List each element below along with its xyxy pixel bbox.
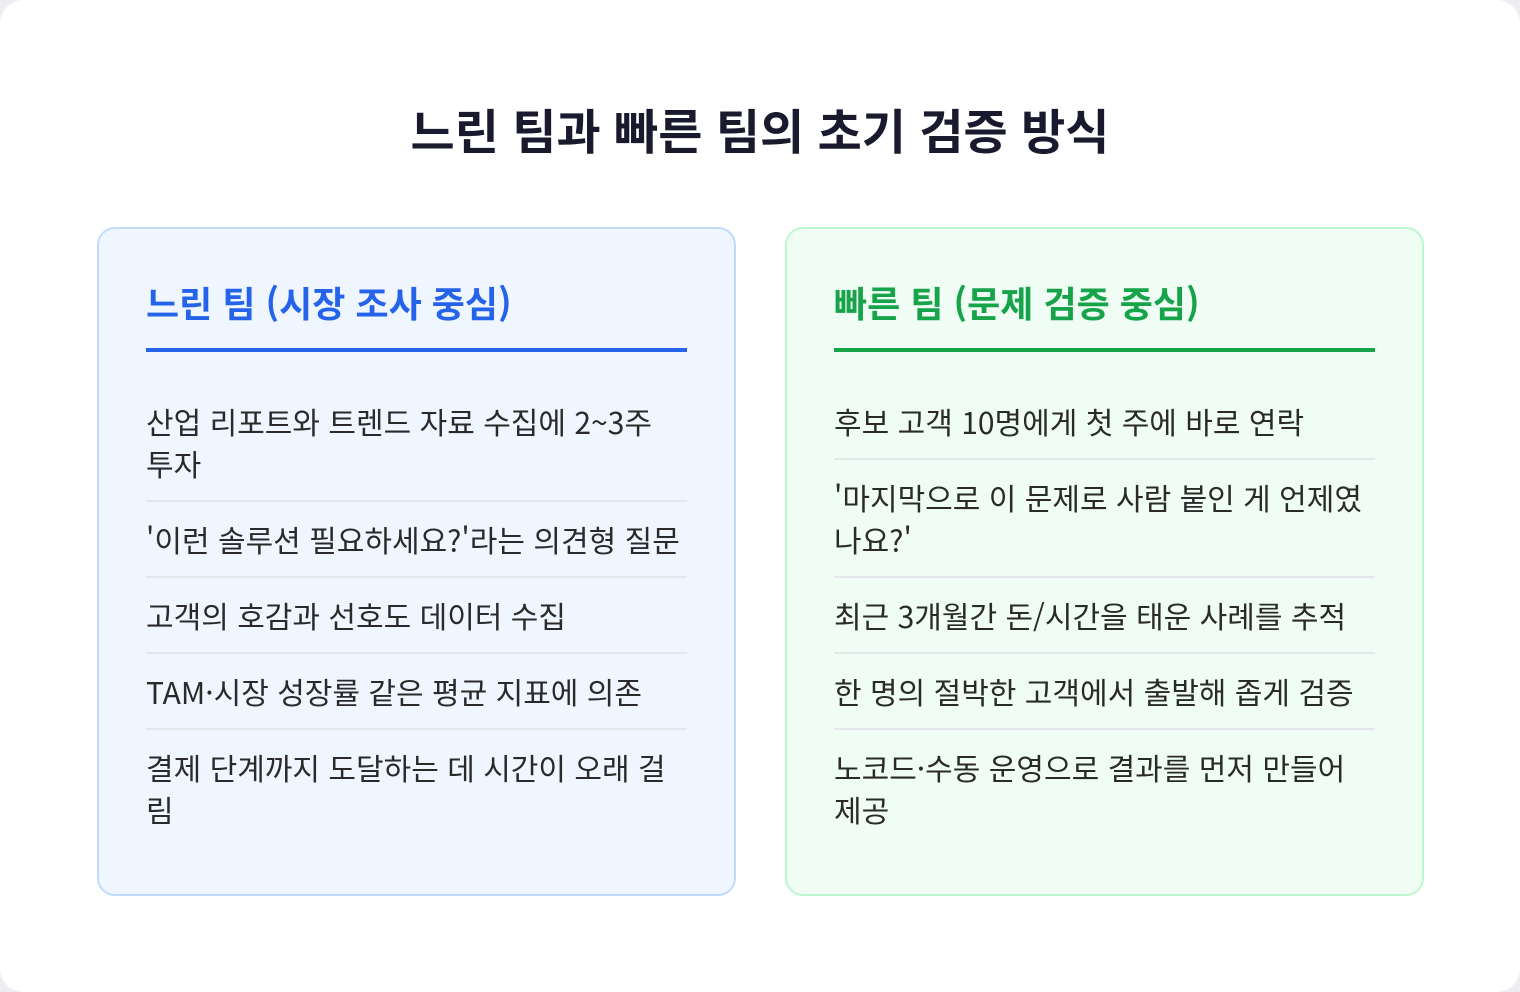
- item 1: 후보 고객 10명에게 첫 주에 바로 연락: [834, 399, 1304, 443]
- item 3: 최근 3개월간 돈/시간을 태운 사례를 추적: [834, 593, 1346, 637]
- item 2: '마지막으로 이 문제로 사람 붙인 게 언제였나요?': [834, 475, 1362, 561]
- item 4: [834, 654, 1375, 730]
- item 3: 고객의 호감과 선호도 데이터 수집: [146, 593, 566, 637]
- title: 느린 팀과 빠른 팀의 초기 검증 방식: [411, 93, 1109, 163]
- heading: slow team: 느린 팀 (시장 조사 중심): [146, 276, 512, 328]
- item 3: [146, 578, 687, 654]
- item 2: '이런 솔루션 필요하세요?'라는 의견형 질문: [146, 517, 680, 561]
- item 2: [146, 502, 687, 578]
- item 4: [146, 654, 687, 730]
- heading: fast team: 빠른 팀 (문제 검증 중심): [834, 276, 1200, 328]
- heading: slow team: [146, 280, 687, 352]
- item 5: 노코드·수동 운영으로 결과를 먼저 만들어 제공: [834, 745, 1345, 831]
- panel: slow team: [97, 227, 736, 896]
- item 1: [834, 400, 1375, 460]
- item 4: 한 명의 절박한 고객에서 출발해 좁게 검증: [834, 669, 1354, 713]
- item 3: [834, 578, 1375, 654]
- item 5: 결제 단계까지 도달하는 데 시간이 오래 걸림: [146, 745, 666, 831]
- item 4: TAM·시장 성장률 같은 평균 지표에 의존: [146, 669, 642, 713]
- item 1: 산업 리포트와 트렌드 자료 수집에 2~3주 투자: [146, 399, 652, 485]
- heading: fast team: [834, 280, 1375, 352]
- panel: fast team: [785, 227, 1424, 896]
